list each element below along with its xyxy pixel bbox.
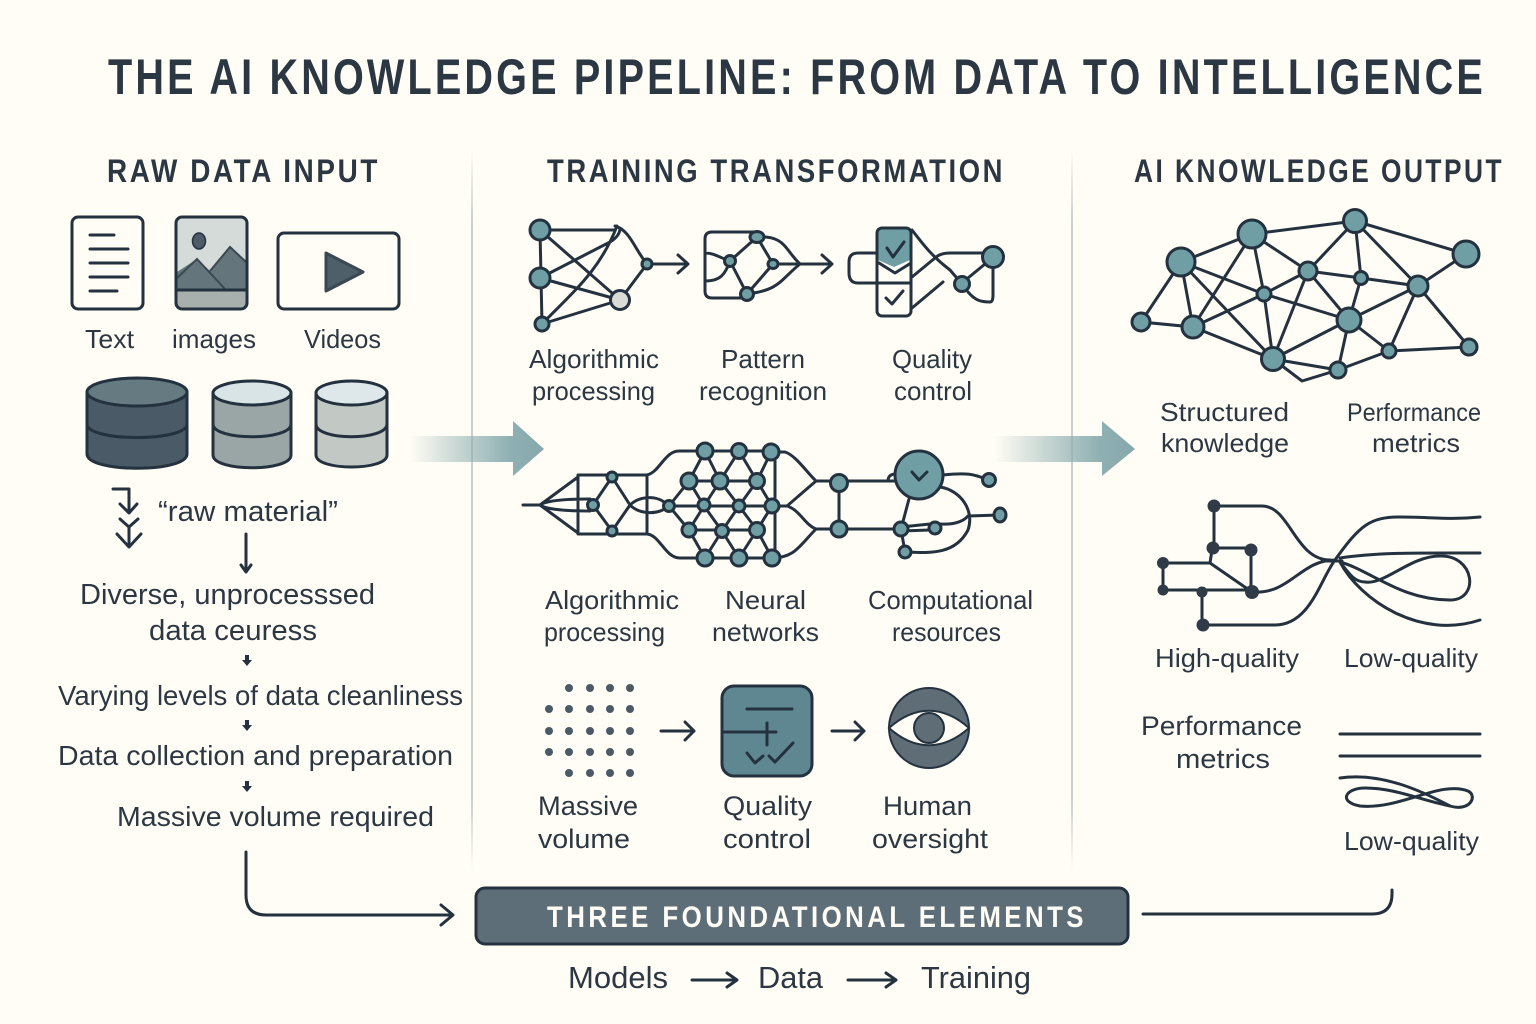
labels: row one: Algorithmic <box>529 344 659 374</box>
labels: structured knowledge, performance metrics: knowledge <box>1161 428 1289 458</box>
icon: image <box>176 217 247 309</box>
labels: row three: volume <box>538 824 630 854</box>
labels: row three: Massive <box>538 791 638 821</box>
labels: row two: Computational <box>868 585 1033 615</box>
text: diverse data: Diverse, unprocesssed <box>80 579 375 611</box>
labels: row three <box>538 791 989 854</box>
labels: row two <box>544 585 1033 647</box>
arrow: input to training <box>410 421 544 476</box>
icon: eye <box>889 688 969 768</box>
label: images: images <box>172 324 256 354</box>
arrow <box>241 534 251 572</box>
label: performance metrics <box>1141 711 1302 774</box>
icon: pattern recognition <box>705 232 832 300</box>
labels: row two: networks <box>712 617 819 647</box>
icon: video <box>278 233 399 309</box>
labels: row three: oversight <box>872 824 989 854</box>
arrow <box>242 781 252 792</box>
chart: performance lines <box>1340 734 1480 807</box>
arrow <box>242 655 252 666</box>
panel: raw data input <box>58 217 463 832</box>
icon: light database <box>316 381 387 467</box>
chart: high and low quality paths <box>1157 500 1480 632</box>
label: performance metrics: metrics <box>1176 744 1270 774</box>
heading: training transformation: TRAINING TRANSFORMATION <box>547 153 1005 189</box>
label: high-quality: High-quality <box>1155 643 1299 673</box>
models data training row: Training <box>921 960 1031 995</box>
label: videos: Videos <box>304 324 381 354</box>
icon: dark database <box>87 378 187 468</box>
labels: row one <box>529 344 972 406</box>
text: collection: Data collection and preparation <box>58 740 453 771</box>
icon: down arrows <box>113 489 141 547</box>
icon: text document <box>72 217 143 309</box>
models data training row: Models <box>568 960 668 995</box>
labels: row two: processing <box>544 617 665 647</box>
labels: row one: Pattern <box>721 344 805 374</box>
banner: three foundational elements <box>476 888 1128 944</box>
labels: row two: resources <box>892 617 1001 647</box>
label: performance metrics: Performance <box>1141 711 1302 741</box>
raw material note: “raw material” <box>158 496 338 528</box>
labels: structured knowledge, performance metrics: Performance <box>1347 399 1481 427</box>
labels: row one: Quality <box>892 344 972 374</box>
panel: ai knowledge output <box>1132 210 1481 856</box>
heading: raw data input: RAW DATA INPUT <box>107 153 380 189</box>
labels: row two: Algorithmic <box>545 585 679 615</box>
banner: three foundational elements: THREE FOUNDATIONAL ELEMENTS <box>547 901 1087 934</box>
icon: quality control <box>849 228 1004 316</box>
labels: row one: control <box>894 376 972 406</box>
label: low-quality: Low-quality <box>1344 643 1478 673</box>
labels: structured knowledge, performance metrics: Structured <box>1160 397 1289 427</box>
arrow <box>832 722 864 740</box>
icon: dot grid <box>545 684 634 777</box>
labels: row one: processing <box>532 376 655 406</box>
chart: knowledge graph <box>1132 210 1479 381</box>
labels: structured knowledge, performance metrics: metrics <box>1372 428 1460 458</box>
text: diverse data <box>80 579 375 647</box>
arrow: training to output <box>995 421 1135 476</box>
arrow: left flow into banner <box>246 852 453 925</box>
models data training row: Data <box>758 960 824 995</box>
text: massive volume: Massive volume required <box>117 801 434 832</box>
arrow <box>661 722 694 740</box>
icon: neural network diagram <box>523 443 1006 566</box>
models data training row <box>568 960 1031 995</box>
label: low-quality: Low-quality <box>1344 826 1479 856</box>
labels: row one: recognition <box>699 376 827 406</box>
label: text: Text <box>85 324 135 354</box>
icon: quality control box <box>722 686 812 776</box>
icon: algorithmic network <box>530 220 688 331</box>
text: diverse data: data ceuress <box>149 615 317 647</box>
labels: row three: Quality <box>723 791 813 821</box>
icon: mid database <box>213 381 291 468</box>
connector: right flow into banner <box>1143 890 1392 914</box>
labels: row three: control <box>723 824 811 854</box>
labels: row three: Human <box>883 791 972 821</box>
panel: training transformation <box>523 220 1033 854</box>
labels: row two: Neural <box>725 585 806 615</box>
text: cleanliness: Varying levels of data cleanliness <box>58 680 463 711</box>
labels: structured knowledge, performance metrics <box>1160 397 1481 458</box>
arrow <box>242 720 252 731</box>
